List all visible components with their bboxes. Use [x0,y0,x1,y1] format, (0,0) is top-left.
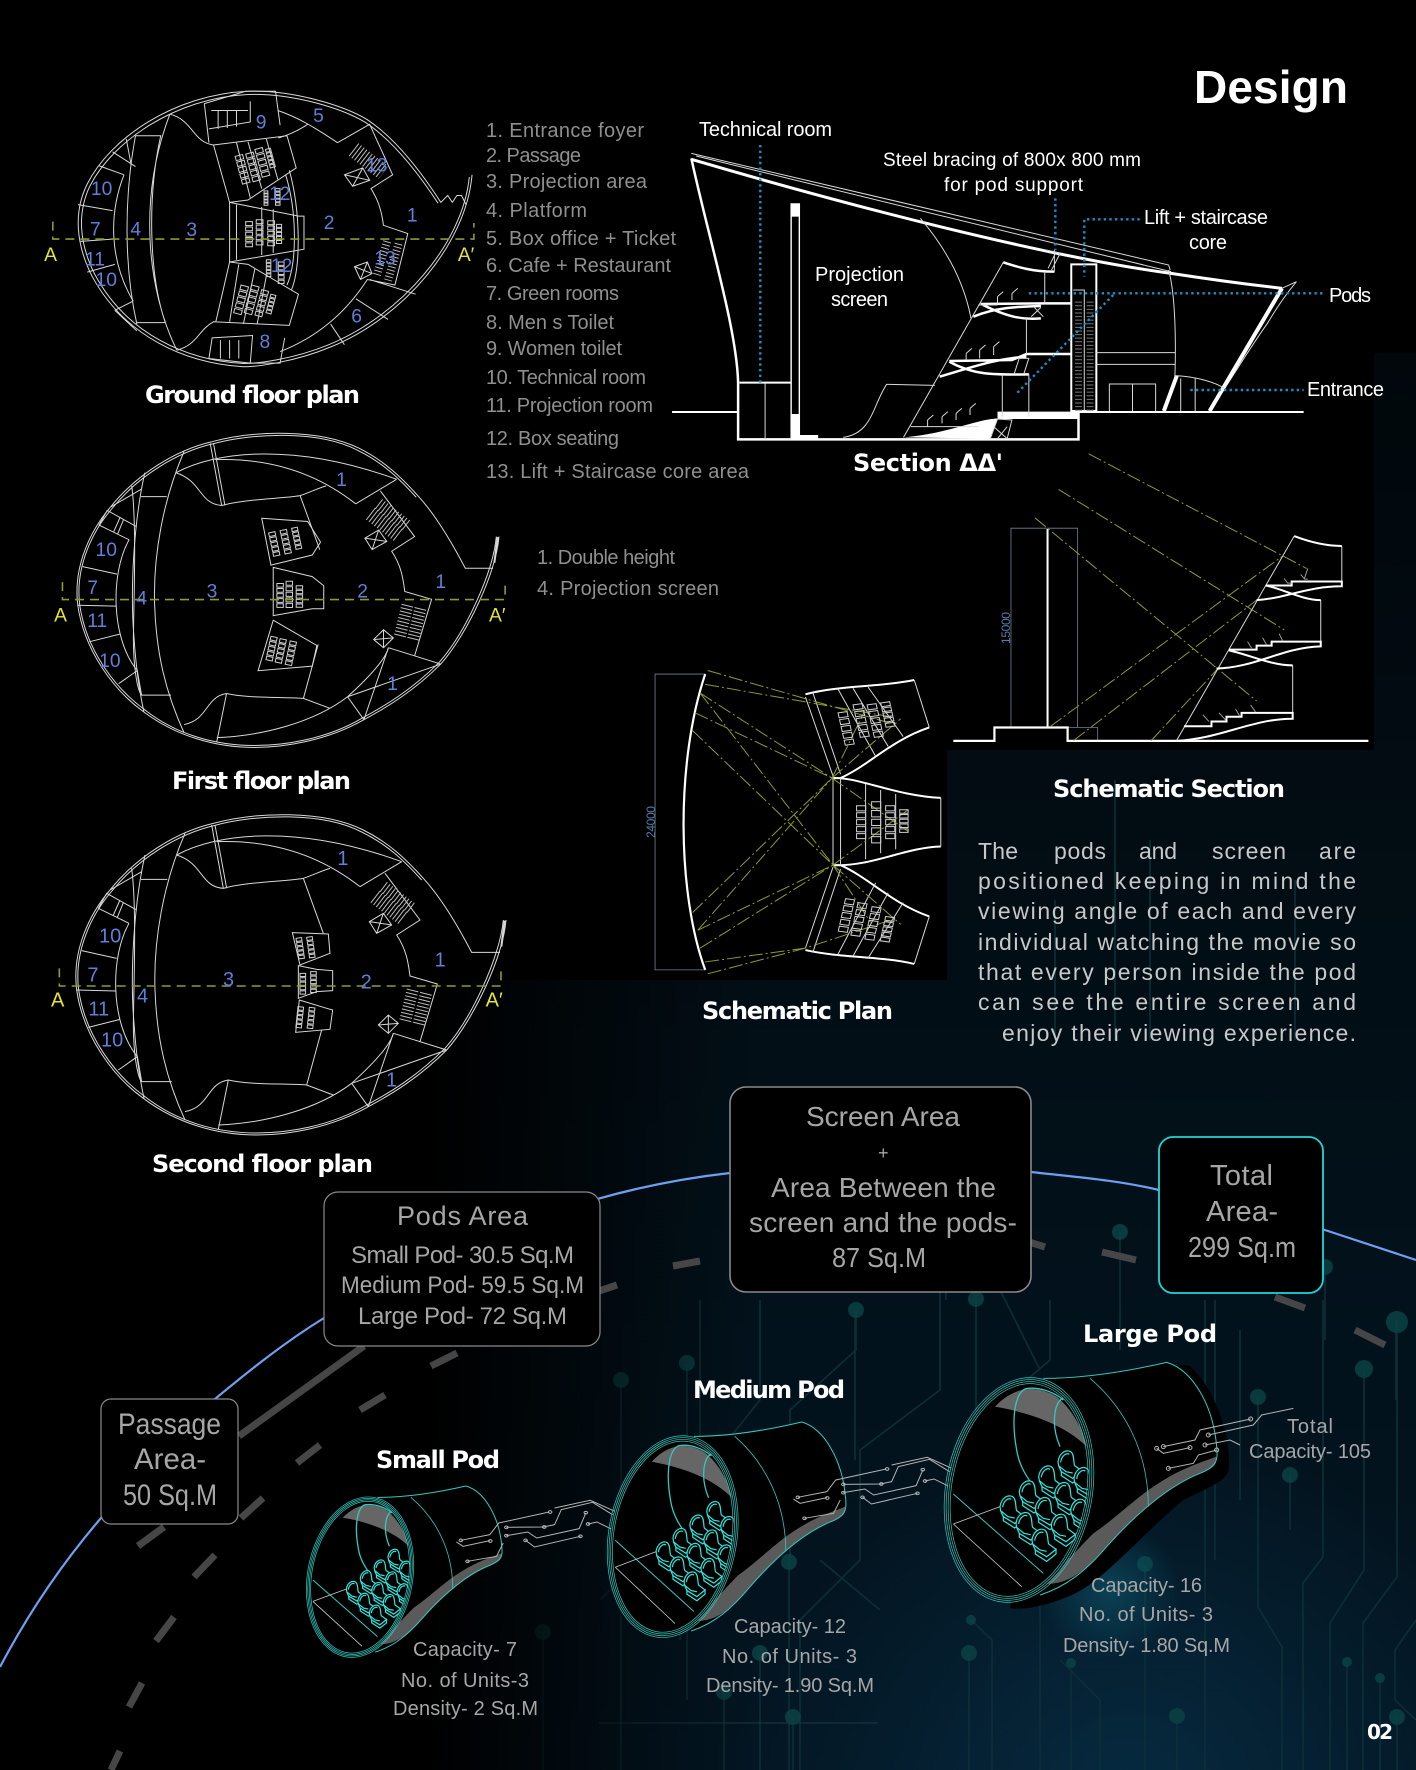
schematic section [953,454,1368,741]
room numbers: 12 [269,184,291,205]
large pod shadow [1010,1365,1229,1609]
room numbers: 3 [207,581,217,602]
section labels: core [1189,232,1227,254]
room numbers: 1 [386,1070,397,1092]
room numbers: 7 [87,578,98,599]
box: screen area: screen and the pods- [749,1207,1017,1238]
legend: 4. Platform [486,200,587,222]
section marks: A [44,245,57,266]
description paragraph: screen [1212,838,1286,864]
room numbers: 10 [99,651,121,672]
box: screen area [730,1087,1031,1292]
description paragraph: individual watching the movie so [978,929,1356,955]
box: passage area: Area- [134,1443,206,1476]
room numbers: 13 [366,156,387,177]
section labels: Lift + staircase [1144,207,1268,229]
dimension 15000: 15000 [999,612,1013,644]
total capacity: Capacity- 105 [1249,1441,1371,1463]
section line A-A' [62,582,505,600]
box: passage area [101,1399,238,1524]
room numbers: 10 [91,179,112,200]
legend: 10. Technical room [486,367,646,389]
description paragraph: and [1139,838,1177,864]
room numbers: 2 [357,581,368,602]
small teal glow [1030,1510,1190,1670]
heading: first floor plan: First floor plan [172,767,351,795]
heading: schematic plan: Schematic Plan [702,997,893,1025]
legend: 1. Entrance foyer [486,120,644,142]
room numbers: 7 [87,965,98,987]
box: pods area: Small Pod- 30.5 Sq.M [351,1242,574,1269]
room numbers: 1 [407,206,418,227]
box: pods area [324,1192,600,1346]
room numbers: 11 [88,999,109,1021]
small pod stats [393,1639,538,1720]
description paragraph: The [978,838,1018,864]
box: screen area: + [878,1143,889,1163]
box: total area: Total [1210,1160,1273,1192]
box: screen area: Screen Area [806,1101,960,1132]
box: passage area: 50 Sq.M [123,1479,217,1512]
room numbers: 1 [336,470,347,491]
small pod [294,1486,502,1666]
room numbers: 11 [85,249,105,270]
description paragraph: positioned keeping in mind the [978,868,1356,894]
schematic plan [655,671,941,974]
legend: 9. Women toilet [486,338,622,360]
medium pod connector [793,1457,952,1520]
section labels: screen [831,289,888,311]
room numbers: 2 [324,213,334,234]
first floor legend: 1. Double height [537,547,675,569]
box: passage area: Passage [118,1408,221,1441]
heading: ground floor plan: Ground floor plan [145,381,360,409]
small pod stats: Density- 2 Sq.M [393,1698,538,1720]
box: total area: Area- [1206,1196,1278,1228]
room numbers: 1 [337,848,348,870]
description paragraph: can see the entire screen and [978,989,1356,1015]
description paragraph [978,838,1356,1046]
room numbers: 4 [137,986,148,1008]
legend: 3. Projection area [486,171,648,193]
legend: 5. Box office + Ticket [486,228,676,250]
section marks [54,606,506,627]
room numbers: 13 [374,248,396,269]
legend [486,120,750,483]
section labels: Pods [1329,285,1371,307]
large pod connector [1155,1408,1293,1470]
legend: 13. Lift + Staircase core area [486,461,750,483]
description paragraph: are [1319,838,1356,864]
large pod stats [1063,1575,1230,1657]
room numbers: 10 [96,540,117,561]
room numbers: 3 [223,969,234,991]
section marks: A′ [489,606,506,627]
grey dashed arc [111,1242,1385,1770]
room numbers: 1 [387,674,398,695]
room numbers [87,470,446,695]
circuit board background pattern [535,780,1416,1770]
section A-A drawing [672,145,1323,439]
room numbers: 3 [186,220,197,241]
room numbers: 10 [101,1030,123,1052]
total capacity [1249,1416,1371,1463]
room numbers: 10 [99,925,121,947]
room numbers: 7 [90,219,101,240]
description paragraph: that every person inside the pod [978,959,1356,985]
section marks: A [51,990,65,1012]
box: pods area: Medium Pod- 59.5 Sq.M [341,1272,584,1299]
room numbers [85,106,418,353]
section labels: Projection [815,264,904,286]
room numbers: 5 [313,106,324,127]
small pod stats: No. of Units-3 [401,1670,529,1692]
dimension 24000: 24000 [644,806,658,838]
description paragraph: enjoy their viewing experience. [1002,1020,1356,1046]
box: total area [1159,1137,1323,1293]
section line A-A' [59,968,501,986]
section marks [51,990,503,1012]
heading: small pod: Small Pod [376,1446,500,1474]
leader lines [760,145,1323,393]
box: pods area: Large Pod- 72 Sq.M [358,1303,567,1330]
heading: large pod: Large Pod [1083,1320,1217,1348]
large pod stats: Capacity- 16 [1091,1575,1202,1597]
section marks: A′ [486,990,503,1012]
second floor plan [51,815,506,1135]
legend: 7. Green rooms [486,283,619,305]
title: Design [1194,61,1348,113]
box: pods area: Pods Area [397,1201,529,1231]
small pod stats: Capacity- 7 [413,1639,517,1661]
section labels: Entrance [1307,379,1384,401]
section marks [44,245,475,266]
section labels: for pod support [944,175,1084,196]
room numbers: 4 [130,219,141,240]
description paragraph: pods [1054,838,1106,864]
ground floor plan [44,91,475,367]
section marks: A′ [458,245,475,266]
first floor legend [537,547,719,600]
heading: section AA: Section ΔΔ' [853,449,1003,477]
medium pod stats: Density- 1.90 Sq.M [706,1675,874,1697]
legend: 11. Projection room [486,395,653,417]
medium pod [592,1422,846,1648]
section marks: A [54,606,67,627]
room numbers: 4 [136,589,147,610]
section labels: Steel bracing of 800x 800 mm [883,150,1141,171]
legend: 12. Box seating [486,428,619,450]
total capacity: Total [1287,1416,1333,1438]
room numbers: 11 [87,611,107,632]
medium pod stats: Capacity- 12 [734,1616,846,1638]
black drawing panels [0,0,1416,980]
room numbers: 9 [256,112,266,133]
first floor plan [54,433,506,747]
box: screen area: Area Between the [771,1172,996,1203]
section line A-A' [53,222,474,239]
room numbers: 6 [351,307,362,328]
heading: second floor plan: Second floor plan [152,1150,373,1178]
room numbers: 2 [361,971,372,993]
section labels [699,119,1384,401]
description paragraph: viewing angle of each and every [978,898,1356,924]
blue arc connector [0,1164,1416,1667]
first floor legend: 4. Projection screen [537,578,719,600]
room numbers: 8 [259,332,270,353]
room numbers: 10 [96,270,117,291]
heading: schematic section: Schematic Section [1053,775,1285,803]
large pod stats: Density- 1.80 Sq.M [1063,1635,1230,1657]
page number: 02 [1367,1720,1393,1744]
room numbers [87,848,446,1092]
box: total area: 299 Sq.m [1188,1232,1296,1264]
room numbers: 12 [271,256,292,277]
background glow [0,1300,1416,1770]
box: screen area: 87 Sq.M [832,1242,926,1273]
room numbers: 1 [435,572,446,593]
legend: 6. Cafe + Restaurant [486,255,671,277]
legend: 8. Men s Toilet [486,312,614,334]
heading: medium pod: Medium Pod [693,1376,845,1404]
room numbers: 1 [435,950,446,972]
section labels: Technical room [699,119,832,141]
legend: 2. Passage [486,145,581,167]
medium pod stats [706,1616,874,1697]
large pod [927,1362,1217,1614]
large pod stats: No. of Units- 3 [1079,1604,1213,1626]
small pod connector [456,1500,615,1563]
medium pod stats: No. of Units- 3 [722,1646,857,1668]
